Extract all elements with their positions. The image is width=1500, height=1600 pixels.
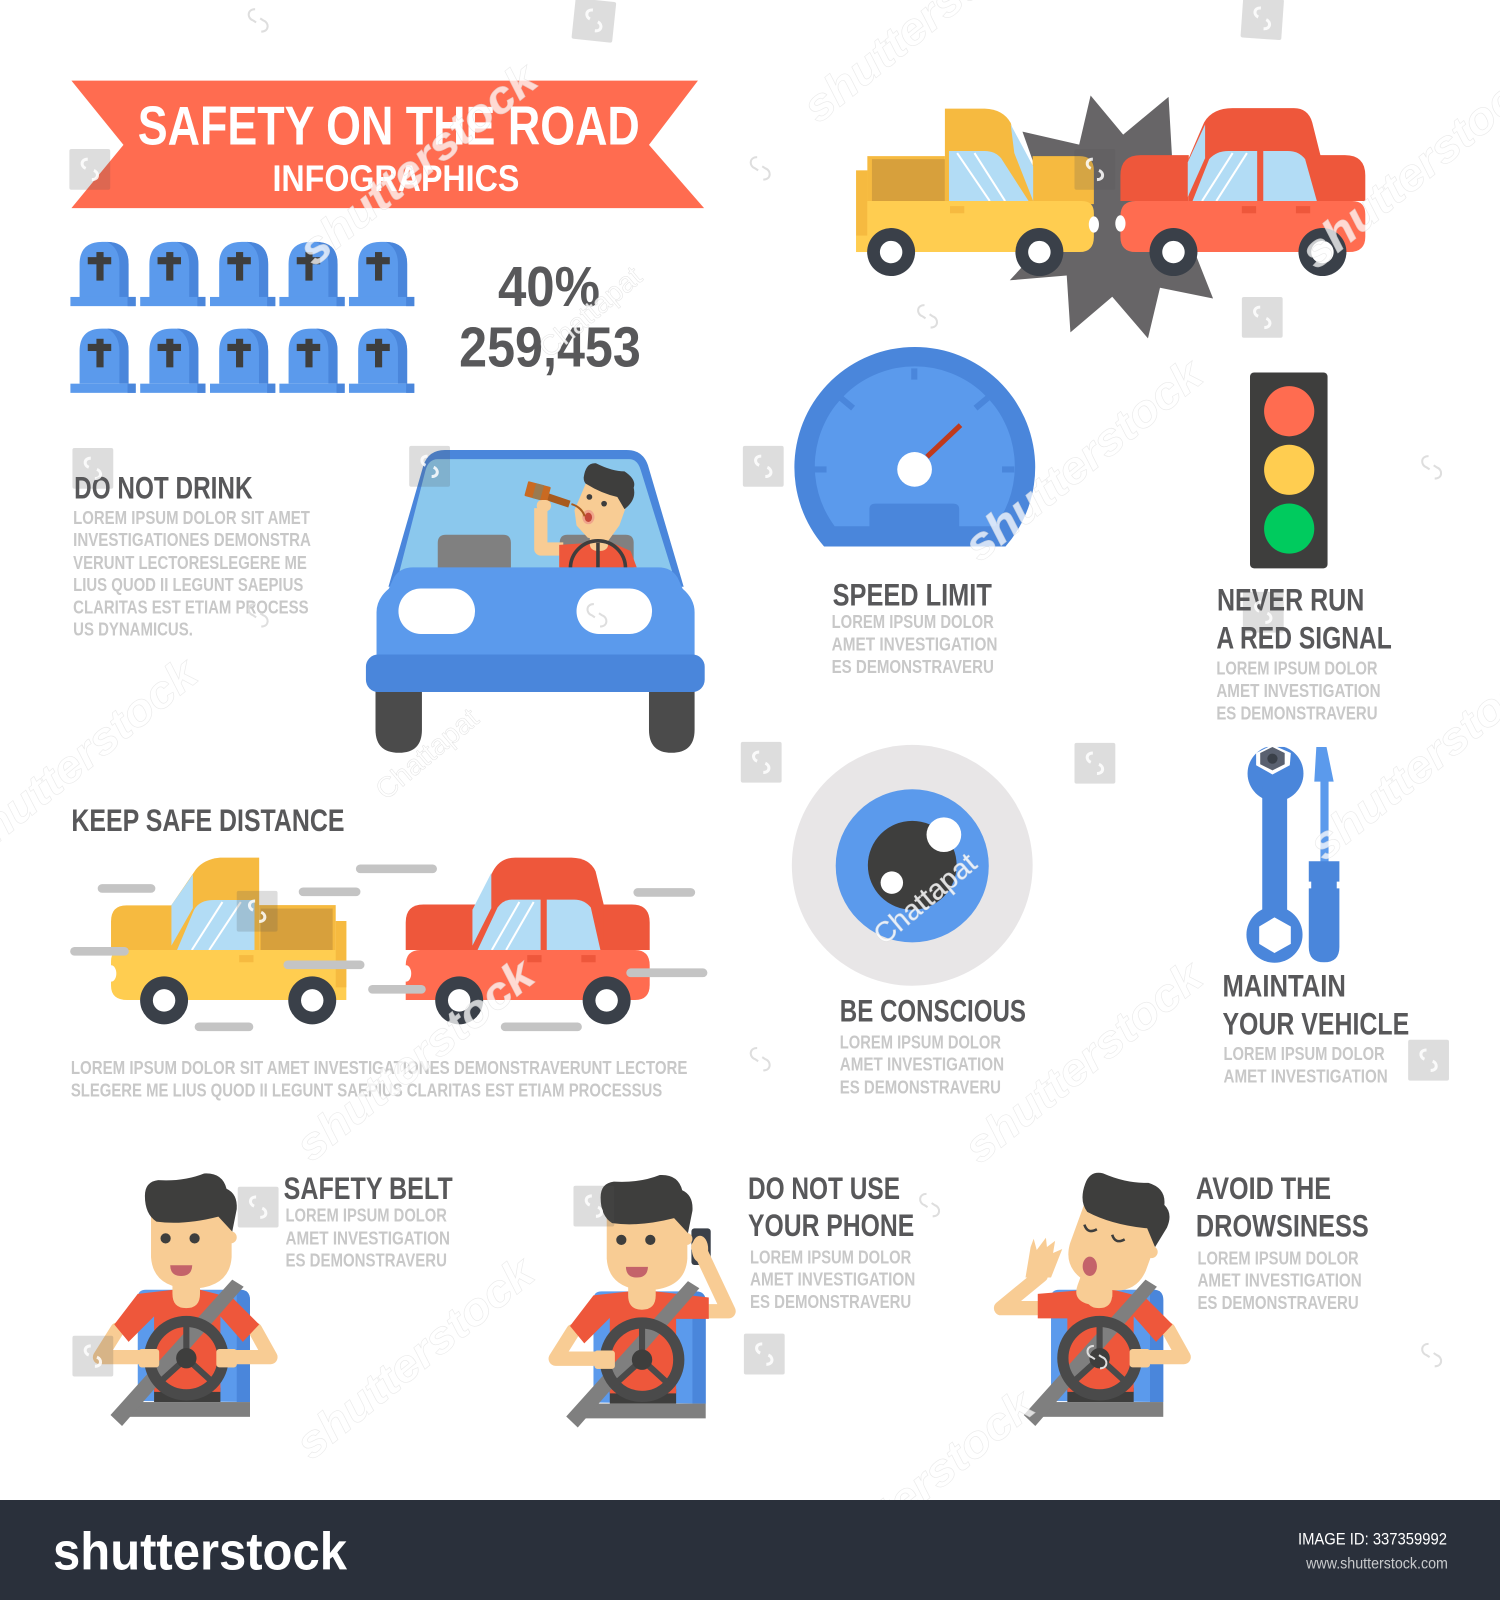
watermark overlay: shutterstock [785, 1378, 1045, 1600]
illustration: car crash [856, 96, 1365, 338]
heading and text: speed limit: AMET INVESTIGATION [832, 634, 997, 655]
heading and text: do not use your phone: ES DEMONSTRAVERU [750, 1291, 911, 1312]
heading and text: do not use your phone: LOREM IPSUM DOLOR [750, 1246, 911, 1267]
heading and text: speed limit: SPEED LIMIT [833, 577, 992, 613]
illustration: driver with safety belt [100, 1173, 270, 1426]
heading and text: do not drink: INVESTIGATIONES DEMONSTRA [73, 529, 311, 550]
heading and text: avoid the drowsiness: DROWSINESS [1196, 1208, 1369, 1244]
illustration: driver on phone [556, 1175, 729, 1428]
heading and text: be conscious [840, 992, 1026, 1097]
statistic [459, 255, 641, 378]
wrench [1246, 735, 1303, 963]
heading and text: safety belt: LOREM IPSUM DOLOR [286, 1205, 447, 1226]
heading and text: maintain your vehicle: MAINTAIN [1222, 968, 1346, 1004]
watermark overlay: shutterstock [954, 347, 1214, 571]
watermark overlay: Chattapat [868, 847, 983, 951]
heading and text: do not drink: DO NOT DRINK [74, 469, 253, 505]
footer logo: shutterstock [53, 1522, 347, 1581]
heading and text: avoid the drowsiness [1196, 1170, 1369, 1313]
heading and text: do not drink: LIUS QUOD II LEGUNT SAEPIUS [73, 574, 303, 595]
heading and text: red signal: AMET INVESTIGATION [1216, 680, 1381, 701]
heading and text: do not use your phone [748, 1170, 915, 1312]
heading and text: be conscious: ES DEMONSTRAVERU [840, 1076, 1001, 1097]
driver drinking [524, 463, 637, 568]
heading and text: maintain your vehicle: AMET INVESTIGATION [1223, 1065, 1388, 1086]
heading and text: safety belt: ES DEMONSTRAVERU [286, 1250, 447, 1271]
heading and text: red signal: ES DEMONSTRAVERU [1216, 702, 1378, 723]
text: keep safe distance description [71, 1057, 687, 1100]
heading and text: do not drink: CLARITAS EST ETIAM PROCESS [73, 596, 309, 617]
heading and text: red signal: LOREM IPSUM DOLOR [1216, 657, 1378, 678]
heading and text: be conscious: LOREM IPSUM DOLOR [840, 1031, 1001, 1052]
heading and text: speed limit: ES DEMONSTRAVERU [832, 656, 994, 677]
icon: wrench and screwdriver [1246, 735, 1339, 963]
watermark overlay: Chattapat [370, 702, 485, 806]
icon: eye [792, 745, 1033, 986]
heading and text: red signal [1216, 582, 1392, 723]
heading: keep safe distance: KEEP SAFE DISTANCE [71, 802, 344, 838]
heading and text: safety belt [284, 1170, 453, 1271]
heading and text: do not drink: VERUNT LECTORESLEGERE ME [73, 552, 307, 573]
heading and text: do not drink [73, 469, 311, 640]
heading and text: safety belt: AMET INVESTIGATION [286, 1227, 450, 1248]
watermark overlay: shutterstock [285, 947, 545, 1171]
heading and text: red signal: NEVER RUN [1217, 582, 1364, 618]
watermark overlay: shutterstock [285, 1245, 545, 1469]
image id: IMAGE ID: 337359992 [1298, 1530, 1447, 1548]
icon: speedometer [794, 347, 1035, 547]
heading and text: speed limit: LOREM IPSUM DOLOR [832, 611, 994, 632]
text: keep safe distance description: LOREM IPSUM DOLOR SIT AMET INVESTIGATIONES DEMONSTRAVERUNT LECTORE [71, 1057, 687, 1078]
subtitle: INFOGRAPHICS [272, 158, 519, 199]
screwdriver [1309, 747, 1339, 962]
heading and text: do not use your phone: YOUR PHONE [748, 1207, 914, 1243]
illustration: blue car with drinking driver [366, 450, 705, 753]
red car [1115, 108, 1365, 276]
icon row: gravestones [70, 242, 414, 393]
heading and text: do not drink: LOREM IPSUM DOLOR SIT AMET [73, 507, 311, 528]
statistic: 259,453 [459, 315, 641, 378]
heading and text: avoid the drowsiness: AMET INVESTIGATION [1197, 1270, 1362, 1291]
heading and text: avoid the drowsiness: LOREM IPSUM DOLOR [1197, 1247, 1359, 1268]
heading and text: maintain your vehicle: YOUR VEHICLE [1222, 1005, 1409, 1041]
illustration: drowsy driver [1001, 1163, 1184, 1426]
heading and text: do not use your phone: DO NOT USE [748, 1170, 900, 1206]
heading and text: avoid the drowsiness: AVOID THE [1196, 1170, 1331, 1206]
heading and text: do not drink: US DYNAMICUS. [73, 619, 193, 640]
heading and text: maintain your vehicle: LOREM IPSUM DOLOR [1223, 1043, 1385, 1064]
explosion [1010, 96, 1213, 338]
watermark overlay: shutterstock [288, 51, 548, 275]
watermark overlay: shutterstock [954, 949, 1214, 1173]
website: www.shutterstock.com [1305, 1555, 1448, 1572]
footer bar [0, 1500, 1500, 1600]
text: keep safe distance description: SLEGERE ME LIUS QUOD II LEGUNT SAEPIUS CLARITAS EST ETIAM PROCESSUS [71, 1079, 662, 1100]
heading and text: do not use your phone: AMET INVESTIGATION [750, 1269, 915, 1290]
heading and text: red signal: A RED SIGNAL [1216, 619, 1392, 655]
illustration: two cars keeping distance [74, 858, 703, 1027]
title: SAFETY ON THE ROAD [138, 94, 640, 156]
heading and text: avoid the drowsiness: ES DEMONSTRAVERU [1197, 1292, 1359, 1313]
heading and text: be conscious: AMET INVESTIGATION [840, 1054, 1004, 1075]
heading and text: speed limit [832, 577, 997, 677]
heading and text: be conscious: BE CONSCIOUS [840, 992, 1026, 1028]
heading and text: safety belt: SAFETY BELT [284, 1170, 453, 1206]
yellow pickup [106, 858, 346, 1024]
speed lines [74, 869, 703, 1027]
heading and text: maintain your vehicle [1222, 968, 1409, 1086]
title banner [71, 81, 704, 208]
red car [401, 858, 650, 1024]
yellow pickup [856, 109, 1099, 276]
statistic: 40% [498, 255, 600, 318]
icon: traffic light [1250, 372, 1328, 568]
watermark overlay: Chattapat [533, 260, 648, 365]
